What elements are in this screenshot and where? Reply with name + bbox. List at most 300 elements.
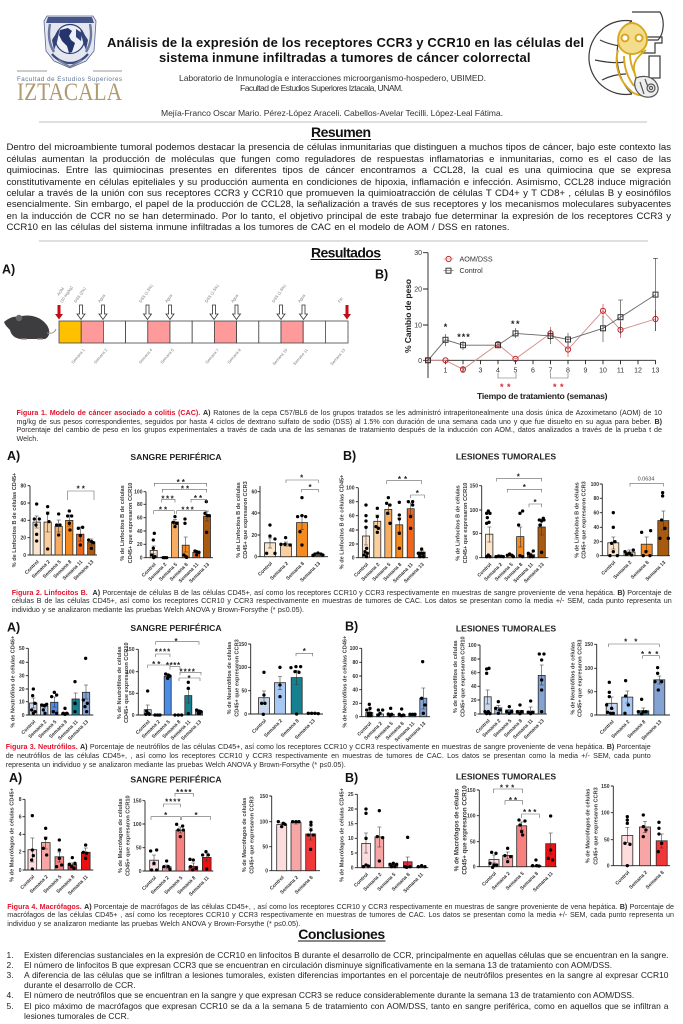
label: B: B) (345, 620, 358, 634)
chart: macrófagos sangre CCR3 (242, 794, 320, 896)
series: Control (426, 258, 658, 363)
chart: macrófagos sangre CCR10: **** (165, 798, 182, 806)
chart: linfocitos B tumor CCR3: 60 (593, 510, 599, 516)
chart: neutrófilos tumor CCR10 (453, 636, 547, 741)
chart: neutrófilos sangre CCR10: **** (179, 668, 196, 676)
chart: macrófagos tumor CCR10: 50 (470, 840, 476, 846)
logo: UNAM crest and FES Iztacala (17, 16, 122, 106)
chart: macrófagos tumor CCR10: Control (481, 870, 498, 888)
chart: neutrófilos tumor CCR3: Semana 2 (610, 719, 631, 740)
chart: linfocitos B tumor CD45: 80 (349, 500, 355, 506)
chart: linfocitos B sangre CD45: Semana 8 (52, 559, 73, 580)
heading: lesiones tumorales: LESIONES TUMORALES (456, 452, 556, 462)
chart: linfocitos B sangre CCR10: Semana 2 (147, 562, 168, 583)
heading: sangre periférica: SANGRE PERIFÉRICA (130, 774, 222, 784)
chart: linfocitos B sangre CD45: Semana 13 (72, 559, 95, 582)
chart: linfocitos B tumor CCR3: % de Linfocitos B de células (575, 482, 581, 558)
chart: macrófagos tumor CCR3: 0 (607, 864, 610, 870)
chart: macrófagos sangre CCR10: 100 (133, 822, 142, 828)
white arrows (77, 305, 308, 320)
chart: linfocitos B tumor CCR3: CD45+ que expresaron CCR3 (581, 481, 587, 559)
text: mg/kg de sus pesos correspondientes, seguidos por hasta 4 ciclos de dextrano sulfato de sodio (DSS) al 1.5% con duración de una semana cada uno y que fue disuelto en su agua para beber. B) (16, 418, 662, 426)
text: 5. (6, 1001, 14, 1011)
chart: neutrófilos tumor CCR3: 150 (585, 642, 593, 648)
chart: linfocitos B tumor CCR10: CD45+ que expresaron CCR10 (463, 483, 469, 563)
chart: linfocitos B tumor CCR10: Semana 2 (483, 562, 504, 583)
chart: macrófagos sangre CCR10: 50 (136, 846, 142, 852)
chart: macrófagos sangre CD45: 4 (19, 832, 22, 838)
series: AOM/DSS (425, 304, 658, 373)
text: en la inducción de CCR no se han determinado. Por lo tanto, el objetivo principal de este trabajo fue determinar la expresión de los receptores CCR3 y (6, 211, 671, 222)
label: B: B) (375, 268, 388, 282)
caption: figure 1 (16, 409, 662, 442)
chart: linfocitos B tumor CD45: * (416, 489, 420, 498)
chart: linfocitos B sangre CCR10: CD45+ que expresaron CCR10 (128, 483, 134, 563)
chart: neutrófilos sangre CD45: Semana 8 (48, 719, 69, 740)
chart: macrófagos tumor CD45: 20 (348, 807, 354, 813)
chart: neutrófilos sangre CCR10: **** (166, 661, 181, 670)
chart: linfocitos B tumor CD45: ** (398, 475, 410, 484)
axis title y: % Cambio de peso (403, 279, 413, 353)
text: 2. (6, 960, 14, 970)
chart: neutrófilos sangre CD45: Semana 13 (67, 719, 90, 742)
chart: macrófagos sangre CD45: 2 (19, 850, 22, 856)
chart: neutrófilos sangre CCR10: 50 (129, 691, 135, 697)
chart: linfocitos B sangre CCR10: Semana 11 (178, 562, 200, 584)
heading: Resumen: Resumen (311, 124, 371, 140)
x tick labels: 10 (599, 368, 607, 374)
text: 1. (6, 950, 14, 960)
significance marks (444, 319, 567, 392)
chart: neutrófilos tumor CCR10: Semana 11 (512, 718, 535, 741)
week labels (70, 347, 347, 366)
treatment labels: Agua (297, 292, 307, 304)
label: A: A) (9, 771, 22, 785)
chart: linfocitos B sangre CCR10: Semana 13 (188, 562, 211, 585)
chart: neutrófilos tumor CCR3: *** (641, 650, 662, 659)
chart: neutrófilos sangre CCR3: Control (251, 718, 268, 735)
chart: macrófagos tumor CD45: Semana 2 (362, 872, 383, 893)
chart: macrófagos sangre CCR3: 150 (260, 794, 268, 800)
chart: macrófagos sangre CCR3: 50 (262, 844, 268, 850)
week labels: Semana 5 (159, 347, 175, 365)
treatment labels: DSS (1.5%) (271, 283, 287, 304)
chart: neutrófilos tumor CD45: Semana 13 (404, 721, 427, 744)
significance marks: ** (511, 319, 521, 329)
chart: neutrófilos sangre CD45: 20 (19, 687, 25, 693)
chart: linfocitos B sangre CD45: Semana 11 (62, 559, 84, 582)
treatment labels: Agua (97, 292, 107, 304)
text: células B de las células CD45+, así como los receptores CCR10 y CCR3 respectivamente en muestras de tumores de CAC. Los datos se presentan como la media +/- SEM, cada punto representa un (12, 597, 672, 605)
chart: neutrófilos tumor CD45: % de Neutrófilos de células CD46+ (342, 635, 348, 728)
chart: neutrófilos sangre CCR3: Semana 8 (280, 718, 301, 739)
chart: neutrófilos tumor CCR3: 100 (585, 666, 593, 672)
x tick labels: 5 (514, 368, 518, 374)
chart: neutrófilos sangre CCR10: Semana 13 (180, 719, 203, 742)
axes (423, 253, 656, 378)
chart: neutrófilos sangre CCR10: % de Neutrófilos de células (117, 646, 123, 719)
text: celular a través de la unión con sus receptores CCR3 y CCR10 que promueven la quimioatracción de células T CD4+ y T CD8+ , células B y eosinófilos (6, 188, 671, 199)
x tick labels: 4 (496, 368, 500, 374)
chart: neutrófilos tumor CCR3: Semana 13 (640, 719, 663, 742)
chart: neutrófilos tumor CD45: 80 (352, 660, 358, 666)
chart: neutrófilos sangre CD45: 30 (19, 674, 25, 680)
y tick labels (414, 250, 422, 365)
chart: macrófagos sangre CCR3: 0 (265, 868, 268, 874)
chart: neutrófilos sangre CD45: 40 (19, 660, 25, 666)
heading: lesiones tumorales: LESIONES TUMORALES (456, 624, 556, 634)
chart: linfocitos B sangre CCR10: Semana 8 (169, 562, 190, 583)
chart: linfocitos B sangre CCR3: 20 (251, 533, 257, 539)
chart: linfocitos B sangre CCR3 (236, 474, 328, 584)
treatment labels: Fin (337, 296, 344, 304)
chart: macrófagos sangre CCR3: CD45+ que expresaron CCR3 (250, 796, 256, 874)
chart: neutrófilos sangre CCR3: * (303, 647, 307, 656)
legend: AOM/DSS (460, 254, 493, 264)
chart: linfocitos B sangre CD45: Control (24, 559, 41, 576)
chart: neutrófilos tumor CCR10: Semana 2 (481, 718, 502, 739)
chart: macrófagos tumor CCR10: Semana 2 (491, 871, 512, 892)
chart: macrófagos sangre CCR10: Semana 5 (163, 875, 184, 896)
chart: linfocitos B tumor CD45 (340, 474, 428, 585)
heading: Resultados: Resultados (311, 244, 381, 260)
chart: macrófagos tumor CCR3 (585, 784, 670, 891)
y tick labels: 20 (414, 286, 422, 294)
text: de neutrófilos de las células CD45+, , así como los receptores CCR10 y CCR3 respectivamente en muestras de tumores de CAC. Los datos se presentan como la media +/- SEM, cada punto (6, 752, 651, 760)
treatment labels: DSS (1.5%) (138, 283, 154, 304)
chart: linfocitos B sangre CCR3: Semana 8 (285, 561, 306, 582)
chart: linfocitos B tumor CCR3: 40 (593, 525, 599, 531)
treatment labels: Agua (230, 292, 240, 304)
chart: linfocitos B sangre CCR10: ** (177, 478, 187, 487)
text: Figura 3. Neutrófilos. A) Porcentaje de neutrófilos de las células CD45+, así como los receptores CCR10 y CCR3 respectivamente en muestras de sangre proveniente de vena hepática. B) Porcentaje (6, 743, 651, 751)
treatment labels (56, 283, 344, 304)
chart: macrófagos tumor CCR3: 150 (601, 784, 610, 790)
chart: macrófagos sangre CCR10: * (164, 811, 168, 820)
chart: macrófagos sangre CCR10: **** (176, 788, 193, 797)
chart: macrófagos tumor CD45: 15 (348, 822, 354, 828)
chart: neutrófilos tumor CCR3: % de Neutrófilos de células (571, 642, 577, 715)
chart: linfocitos B sangre CCR10: Control (141, 561, 158, 579)
chart: macrófagos sangre CD45: Semana 5 (42, 874, 63, 895)
chart: macrófagos sangre CD45: 6 (19, 814, 22, 820)
chart: macrófagos sangre CCR10: 150 (133, 798, 142, 804)
chart: macrófagos sangre CCR10: 0 (139, 869, 142, 875)
line chart: weight change (403, 250, 659, 401)
chart: linfocitos B sangre CD45: 80 (20, 484, 26, 490)
chart: neutrófilos sangre CD45: 50 (19, 646, 25, 652)
chart: neutrófilos sangre CCR10: 150 (126, 647, 135, 653)
chart: linfocitos B tumor CCR10 (456, 472, 548, 585)
chart: macrófagos tumor CD45: Semana 8 (391, 872, 412, 893)
chart: macrófagos tumor CCR3: Semana 2 (628, 870, 649, 891)
week labels: Semana 7 (204, 347, 220, 365)
icon: globe lines (589, 12, 663, 95)
caption: figure 2 (12, 589, 672, 614)
heading: sangre periférica: SANGRE PERIFÉRICA (130, 452, 222, 462)
chart: neutrófilos sangre CCR10: **** (155, 648, 171, 656)
chart: linfocitos B tumor CD45: % de Linfocitos B de células CD45+ (340, 474, 346, 569)
panel: figure 4 macrophages (9, 771, 670, 898)
chart: linfocitos B tumor CD45: 20 (349, 542, 355, 548)
chart: linfocitos B sangre CD45 (12, 472, 97, 582)
chart: neutrófilos sangre CCR10: Semana 11 (170, 719, 192, 742)
chart: macrófagos sangre CD45: 0 (19, 868, 22, 874)
chart: neutrófilos sangre CCR10: Semana 2 (141, 719, 162, 740)
chart: macrófagos sangre CD45: 8 (19, 797, 22, 803)
chart: linfocitos B sangre CCR3: Control (257, 560, 274, 578)
text: durante el desarrollo de CCR. (24, 980, 136, 990)
icon: shell (635, 76, 658, 97)
chart: neutrófilos tumor CCR10: Semana 5 (492, 718, 513, 739)
chart: macrófagos sangre CCR10: Semana 11 (188, 875, 211, 898)
y tick labels: 30 (414, 250, 422, 257)
x tick labels: 6 (531, 368, 535, 374)
affiliation: Laboratorio de Inmunología e interacciones microorganismo-hospedero, UBIMED. (179, 73, 486, 83)
chart: neutrófilos tumor CCR10: Semana 13 (523, 718, 546, 741)
chart: neutrófilos tumor CCR3: 0 (590, 713, 593, 719)
chart: neutrófilos tumor CCR10: 100 (468, 643, 477, 649)
chart: neutrófilos sangre CCR3: 150 (239, 642, 247, 648)
chart: linfocitos B tumor CCR10: Semana 11 (512, 562, 535, 584)
chart: linfocitos B sangre CCR10: 100 (134, 490, 143, 496)
chart: macrófagos sangre CCR3: Semana 2 (279, 875, 300, 896)
x tick labels: 11 (617, 368, 624, 374)
chart: neutrófilos sangre CCR10 (117, 637, 203, 742)
chart: linfocitos B tumor CCR10: * (517, 472, 521, 482)
chart: neutrófilos sangre CD45: Semana 5 (37, 719, 58, 740)
chart: macrófagos tumor CCR10: 150 (467, 788, 476, 794)
chart: linfocitos B tumor CCR3: 100 (591, 482, 599, 488)
chart: linfocitos B tumor CCR10: % de Linfocitos B de células (456, 485, 462, 561)
chart: neutrófilos sangre CCR10: * (187, 674, 191, 683)
icon: UNAM crest (44, 16, 96, 68)
chart: neutrófilos tumor CCR3 (571, 638, 670, 742)
legend (444, 254, 493, 275)
text: representa un individuo y se analizaron mediante las pruebas Welch ANOVA y Brown-Forsythe (* p≤0.05). (6, 760, 346, 768)
chart: linfocitos B tumor CCR10: Control (476, 561, 494, 579)
chart: macrófagos sangre CD45: Semana 2 (29, 874, 50, 895)
chart: macrófagos tumor CCR10: ** (509, 796, 519, 805)
label: A: A) (7, 620, 20, 634)
logo: right owl and globe (589, 12, 663, 97)
chart: linfocitos B sangre CCR10: *** (181, 506, 195, 514)
chart: macrófagos tumor CD45: Control (353, 871, 370, 889)
treatment labels: AOM (56, 286, 65, 297)
chart: linfocitos B tumor CD45: Semana 8 (382, 562, 403, 583)
chart: neutrófilos sangre CCR3: Semana 13 (294, 718, 317, 741)
chart: linfocitos B sangre CCR10: ** (181, 484, 191, 494)
label: A: A) (7, 449, 20, 463)
chart: neutrófilos sangre CCR3: % de Neutrófilos de células (227, 642, 233, 714)
label: A: A) (2, 262, 15, 276)
week labels: Semana 8 (226, 347, 242, 365)
text: IZTACALA: IZTACALA (17, 79, 122, 106)
chart: linfocitos B sangre CCR10 (120, 478, 213, 585)
chart: neutrófilos tumor CCR3: Semana 8 (626, 719, 647, 740)
chart: neutrófilos sangre CCR10: * (174, 637, 178, 646)
x tick labels: 13 (652, 368, 659, 374)
chart: macrófagos sangre CD45: Semana 11 (67, 874, 90, 897)
chart: macrófagos sangre CCR10: Semana 8 (176, 875, 197, 896)
chart: linfocitos B tumor CCR3: 80 (593, 496, 599, 502)
chart: neutrófilos sangre CCR10: 100 (126, 670, 135, 676)
chart: neutrófilos tumor CD45: 100 (350, 646, 358, 652)
chart: linfocitos B sangre CCR3: 40 (251, 511, 257, 517)
x tick labels: 8 (566, 368, 570, 374)
chart: linfocitos B tumor CCR10: Semana 5 (494, 562, 515, 583)
chart: neutrófilos sangre CCR3: Semana 2 (263, 718, 284, 739)
chart: neutrófilos sangre CCR3: CD45+ que expresaron CCR3 (234, 639, 240, 717)
chart: macrófagos sangre CCR10: Control (141, 875, 158, 892)
text: Facultad de Estudios Superiores: Facultad de Estudios Superiores (17, 76, 122, 83)
chart: linfocitos B tumor CD45: 100 (346, 486, 355, 492)
chart: linfocitos B sangre CCR10: 0 (140, 556, 143, 562)
chart: neutrófilos tumor CCR10: CD45+ que expresaron CCR10 (461, 636, 467, 717)
chart: macrófagos sangre CCR10: CD45+ que expresaron CCR10 (125, 795, 131, 876)
chart: linfocitos B tumor CCR3: 0 (596, 554, 599, 560)
chart: macrófagos tumor CCR3: % de Macrófagos de células (585, 789, 591, 863)
chart: neutrófilos sangre CD45: Control (20, 719, 38, 736)
label: B: B) (343, 449, 356, 463)
text: quimiocinas. Entre las quimiocinas presentes en diferentes tipos de cáncer encontramos a CCL28, la cual es una quimiocina que se expresa (6, 165, 671, 176)
chart: linfocitos B sangre CCR10: 20 (137, 542, 143, 548)
chart: neutrófilos sangre CCR10: ** (152, 660, 162, 669)
chart: macrófagos tumor CCR3: CD45+ que expresaron CCR3 (594, 787, 600, 865)
week labels: Semana 10 (271, 347, 289, 366)
chart: linfocitos B tumor CD45: Semana 13 (403, 562, 426, 585)
chart: linfocitos B sangre CD45: 60 (20, 501, 26, 507)
chart: linfocitos B sangre CCR3: * (308, 483, 312, 492)
chart: linfocitos B sangre CD45: ** (77, 484, 87, 494)
icon: gold owl (617, 23, 652, 95)
chart: neutrófilos sangre CD45: Semana 11 (57, 719, 80, 742)
text: El pico máximo de macrófagos que expresan CCR10 se da a la semana 5 de tratamiento con AOM/DSS, tanto en sangre periférica, como en aquellos que se infiltran a (24, 1001, 668, 1011)
chart: macrófagos tumor CCR3: 100 (601, 810, 610, 816)
chart: linfocitos B sangre CCR10: ** (194, 494, 204, 503)
x tick labels (444, 368, 659, 374)
chart: linfocitos B tumor CCR10: 0 (475, 556, 478, 562)
list: conclusions (6, 950, 668, 1021)
label: B: B) (345, 771, 358, 785)
chart: linfocitos B tumor CD45: Semana 11 (392, 562, 415, 584)
chart: macrófagos tumor CD45: Semana 5 (376, 872, 397, 893)
chart: linfocitos B tumor CCR3: Semana 8 (630, 560, 651, 581)
chart: linfocitos B sangre CCR3: 60 (251, 490, 257, 496)
text: Figura 1. Modelo de cáncer asociado a colitis (CAC). A) Ratones de la cepa C57/BL6 de los grupos tratados se les administró intraperitonealmente una dosis única de Azoximetano (AOM) de 10 (16, 409, 662, 417)
significance marks: *** (457, 332, 471, 342)
chart: neutrófilos tumor CCR10: 20 (471, 698, 477, 704)
text: El número de neutrófilos que se encuentran en la sangre y que expresan CCR3 se reduce considerablemente durante la semana 13 de tratamiento con AOM/DSS. (24, 990, 634, 1000)
chart: macrófagos sangre CD45: % de Macrófagos de células CD45+ (10, 787, 16, 882)
chart: macrófagos tumor CCR10: Semana 5 (505, 871, 526, 892)
week labels: Semana 2 (93, 347, 109, 365)
affiliation: Facultad de Estudios Superiores Iztacala, UNAM. (240, 83, 403, 93)
treatment labels: DSS (2%) (73, 286, 87, 304)
chart: neutrófilos tumor CCR3: Control (599, 719, 616, 736)
text: El número de linfocitos B que expresan CCR3 que se encuentran en circulación disminuye significativamente en la semana 13 de tratamiento con AOM/DSS. (24, 960, 612, 970)
chart: macrófagos tumor CCR10 (454, 784, 557, 893)
title (107, 35, 584, 65)
divider lines (17, 70, 122, 72)
week labels: Semana 1 (70, 347, 86, 365)
chart: linfocitos B sangre CCR3: * (300, 474, 304, 482)
chart: linfocitos B tumor CCR3 (575, 476, 670, 583)
chart: linfocitos B sangre CCR10: 40 (137, 529, 143, 535)
chart: neutrófilos sangre CD45: 10 (19, 700, 25, 706)
caption: figure 3 (6, 743, 651, 768)
chart: linfocitos B tumor CCR10: * (523, 483, 527, 492)
chart: linfocitos B sangre CD45: Semana 5 (42, 559, 63, 580)
chart: neutrófilos tumor CD45: Semana 8 (385, 721, 406, 742)
text: individuo y se analizaron mediante las pruebas Welch ANOVA y Brown-Forsythe (* p≤0.05). (7, 920, 300, 928)
chart: neutrófilos tumor CD45: Semana 5 (374, 721, 395, 742)
chart: neutrófilos tumor CCR10: 0 (474, 712, 477, 718)
treatment labels: DSS (1.5%) (204, 283, 220, 304)
chart: neutrófilos sangre CCR3: 50 (241, 688, 247, 694)
chart: linfocitos B tumor CCR10: * (533, 498, 537, 507)
text: A diferencia de las células que se infiltran a lesiones tumorales, existen diferencias importantes en el porcentaje de neutrófilos presentes en la sangre al expresar CCR10 (24, 970, 668, 980)
chart: macrófagos tumor CCR10: CD45+ que expresaron CCR10 (462, 785, 469, 875)
chart: linfocitos B sangre CD45: Semana 2 (31, 559, 52, 580)
chart: neutrófilos tumor CCR10: 60 (471, 670, 477, 676)
significance marks: ** (553, 382, 567, 392)
chart: neutrófilos tumor CCR10: % de Neutrófilos de células (453, 640, 459, 713)
chart: macrófagos sangre CD45: Control (19, 874, 37, 891)
red arrows (55, 305, 351, 320)
text: células aumentan la producción de moléculas que fungen como reguladores de respuestas inflamatorias e inmunitarias, como es el caso de las (6, 154, 671, 165)
chart: linfocitos B sangre CD45: 40 (20, 518, 26, 524)
chart: linfocitos B tumor CD45: Control (353, 561, 370, 579)
week labels: Semana 13 (329, 347, 347, 366)
panel: figure 3 neutrophils (7, 620, 670, 744)
chart: macrófagos tumor CD45: 25 (348, 792, 354, 798)
chart: linfocitos B sangre CD45: 0 (23, 553, 26, 559)
chart: linfocitos B tumor CCR3: 0.0634 (638, 476, 654, 482)
chart: linfocitos B sangre CCR10: 60 (137, 516, 143, 522)
chart: macrófagos tumor CCR10: *** (523, 808, 538, 817)
treatment labels: (10 mg/kg) (59, 284, 74, 304)
chart: neutrófilos tumor CD45: Semana 2 (363, 721, 384, 742)
y tick labels: 0 (418, 358, 422, 365)
significance marks: * (444, 322, 448, 332)
chart: linfocitos B tumor CCR10: Semana 8 (503, 562, 524, 583)
text: Dentro del microambiente tumoral podemos destacar la presencia de células inmunitarias que distinguen a muchos tipos de cáncer, bajo este contexto las (6, 142, 671, 153)
chart: macrófagos tumor CCR3: Control (614, 869, 632, 887)
chart: linfocitos B tumor CD45: 40 (349, 528, 355, 534)
authors: Mejía-Franco Oscar Mario. Pérez-López Araceli. Cabellos-Avelar Tecilli. López-Leal Fátima. (161, 108, 503, 118)
treatment labels: Agua (164, 292, 174, 304)
chart: neutrófilos sangre CD45: Semana 2 (27, 719, 48, 740)
chart: macrófagos sangre CCR3: Semana 8 (294, 875, 315, 896)
timeline cells (59, 321, 348, 343)
chart: linfocitos B tumor CD45: 60 (349, 514, 355, 520)
panel: figure 2 lymphocytes B (7, 449, 670, 585)
chart: macrófagos tumor CCR10: 0 (473, 864, 476, 870)
text: Figura 4. Macrófagos. A) Porcentaje de macrófagos de las células CD45+, , así como los receptores CCR10 y CCR3 respectivamente en muestras de sangre proveniente de vena hepática. B) Porcentaje de (7, 903, 674, 911)
chart: macrófagos sangre CCR3: Control (269, 874, 286, 892)
x tick labels: 3 (479, 368, 483, 374)
chart: linfocitos B sangre CCR10: Semana 5 (158, 562, 179, 583)
chart: linfocitos B sangre CCR3: CD45+ que expresaron CCR3 (243, 481, 249, 559)
chart: linfocitos B tumor CCR3: Semana 13 (644, 560, 667, 583)
chart: linfocitos B sangre CCR10: *** (161, 494, 175, 504)
heading: sangre periférica: SANGRE PERIFÉRICA (130, 623, 222, 633)
caption: figure 4 (7, 903, 674, 928)
chart: macrófagos tumor CD45: Semana 11 (402, 872, 425, 894)
chart: macrófagos sangre CD45: Semana 8 (55, 874, 76, 895)
chart: neutrófilos sangre CCR3 (227, 639, 323, 741)
